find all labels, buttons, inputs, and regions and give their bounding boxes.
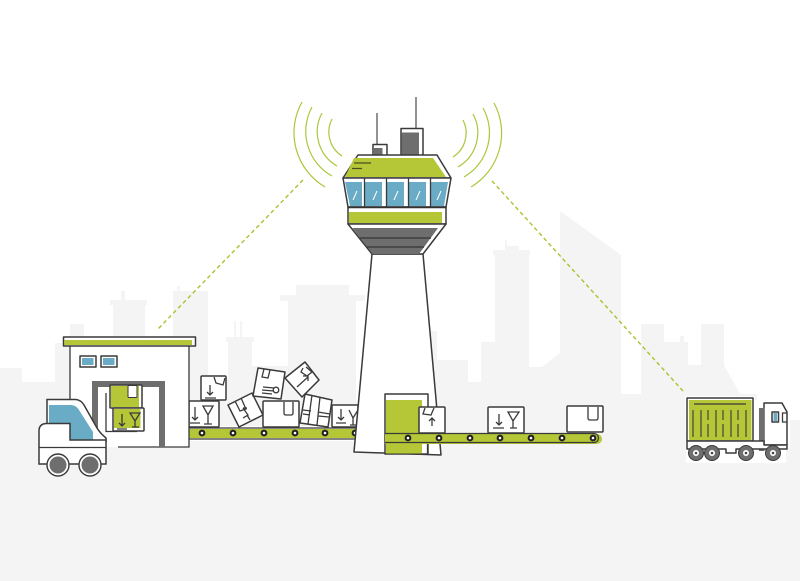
conveyor: tower to truck bbox=[385, 434, 602, 444]
parcel: diamond tilted bbox=[285, 362, 319, 397]
tower shaft bbox=[354, 254, 441, 455]
warehouse bbox=[64, 337, 196, 447]
warehouse body bbox=[70, 345, 189, 447]
tower roof bbox=[343, 155, 451, 178]
signal link to warehouse bbox=[157, 180, 303, 330]
forklift bbox=[39, 400, 106, 476]
tower base cone bbox=[348, 224, 446, 254]
background: city skyline and ground bbox=[0, 211, 800, 581]
parcel: taped on belt bbox=[567, 406, 603, 432]
parcel: tilted with label bbox=[253, 368, 285, 399]
parcel: up arrow at tower bbox=[419, 407, 445, 433]
parcel: fragile behind tower bbox=[332, 405, 358, 427]
forklift mast bbox=[106, 393, 137, 432]
parcel: fragile on belt bbox=[488, 407, 524, 433]
parcel: taped large bbox=[263, 401, 299, 427]
tower doorway bbox=[385, 394, 428, 454]
control tower bbox=[343, 97, 451, 455]
signal waves: left bbox=[294, 102, 342, 187]
parcel: fragile stacked bbox=[201, 376, 226, 400]
parcel: tilted with arrow bbox=[228, 393, 263, 427]
warehouse roof bbox=[64, 337, 196, 346]
truck container bbox=[687, 398, 753, 441]
truck cab bbox=[759, 403, 787, 451]
container truck bbox=[685, 396, 790, 463]
warehouse windows bbox=[80, 356, 117, 367]
warehouse door frame bbox=[92, 381, 165, 447]
forklift body bbox=[39, 424, 106, 464]
tower lower band bbox=[348, 207, 446, 224]
forklift window bbox=[49, 405, 93, 440]
tower antennas bbox=[373, 97, 423, 156]
signal link to truck bbox=[492, 181, 683, 391]
forklift wheels bbox=[47, 454, 101, 476]
forklift cab bbox=[47, 400, 106, 442]
tower windows bbox=[343, 178, 451, 207]
stacked cargo bbox=[110, 385, 144, 431]
signal waves: right bbox=[453, 103, 502, 187]
truck wheels bbox=[688, 446, 780, 460]
parcel pile bbox=[189, 362, 358, 427]
conveyor: warehouse to tower bbox=[186, 426, 358, 441]
parcel: skewed straps bbox=[300, 394, 332, 427]
truck chassis bbox=[687, 441, 787, 453]
parcel: fragile bottom bbox=[189, 401, 219, 427]
